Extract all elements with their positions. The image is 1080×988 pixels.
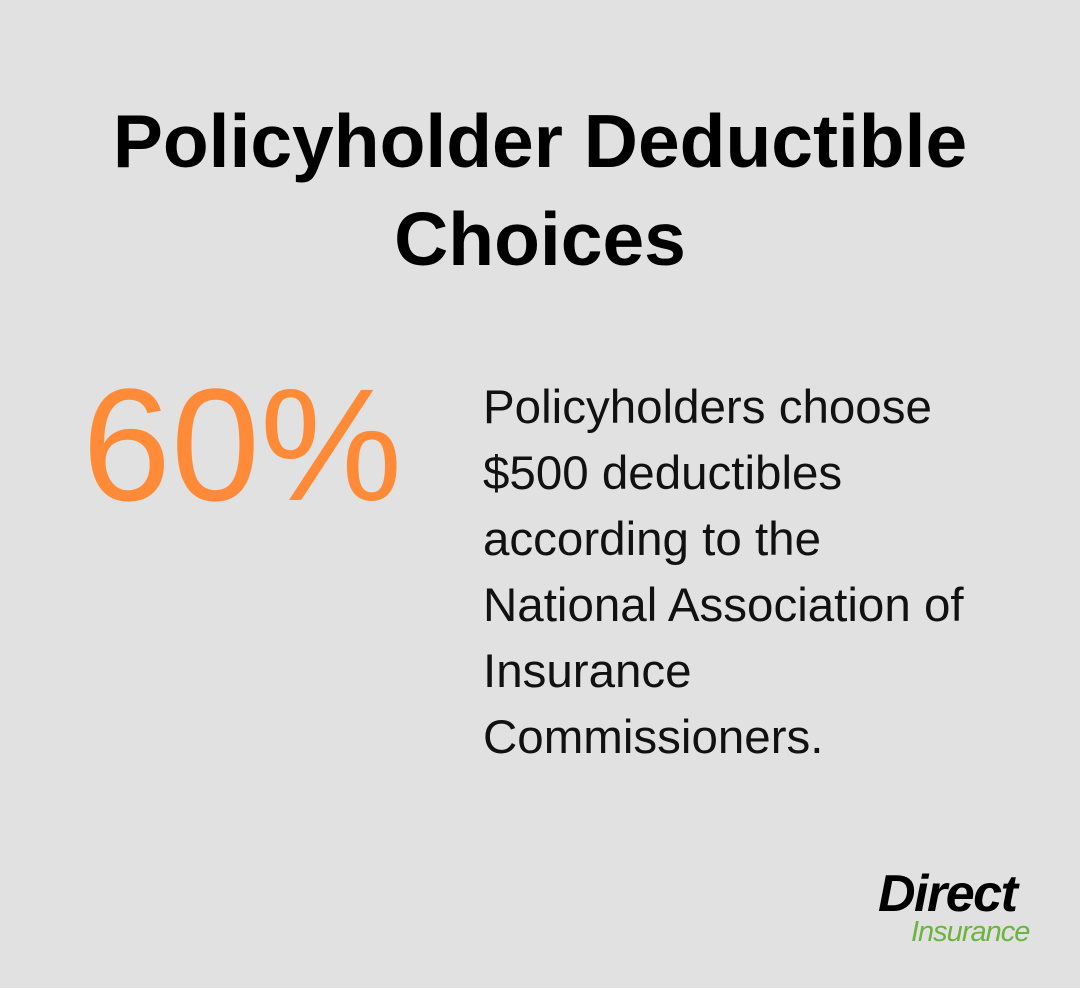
logo: Direct Insurance: Direct (878, 865, 1016, 923)
stat: 60%: 60% (82, 355, 402, 534)
title: Policyholder Deductible (113, 99, 967, 183)
description text: according to the (483, 513, 821, 566)
title (113, 99, 967, 281)
description text: Insurance (483, 645, 692, 698)
logo: Direct Insurance (878, 865, 1030, 948)
description text: Commissioners. (483, 711, 823, 764)
title: Choices (394, 197, 686, 281)
description text: Policyholders choose (483, 381, 932, 434)
description text: $500 deductibles (483, 447, 842, 500)
logo: Direct Insurance: Insurance (911, 916, 1029, 948)
description text: National Association of (483, 579, 964, 632)
description text (483, 381, 964, 764)
